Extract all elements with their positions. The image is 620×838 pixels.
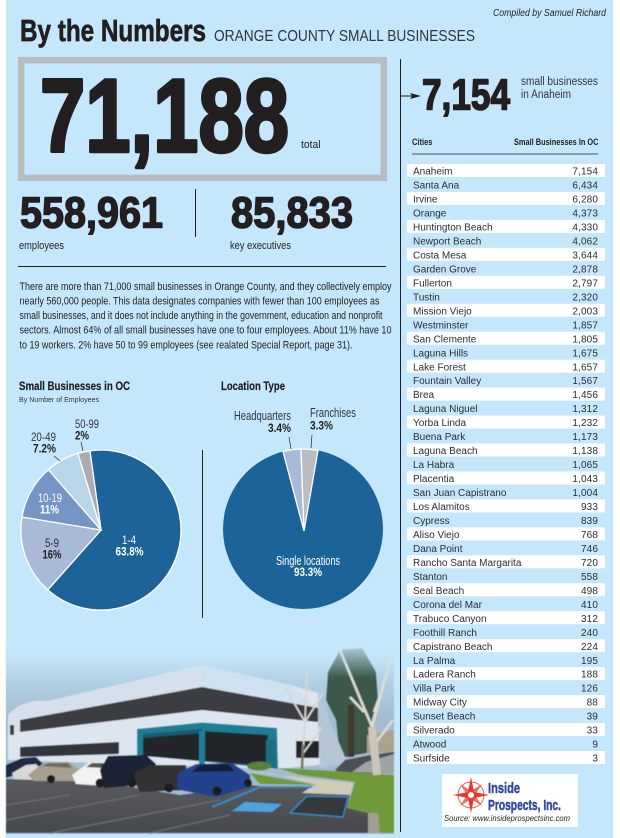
table: cities: 7,154 (572, 167, 598, 178)
intro paragraph: sectors. Almost 64% of all small businesses have one to four employees. About 11% have 10 (20, 324, 392, 336)
table: cities: Dana Point (413, 544, 463, 555)
stat: key executives: key executives (230, 240, 291, 252)
intro paragraph: nearly 560,000 people. This data designates companies with fewer than 100 employees as (20, 296, 380, 308)
pie label: 50-99: 50-99 (75, 417, 99, 431)
heading: small businesses in OC: Small Businesses in OC (19, 379, 130, 393)
table: cities: Midway City (413, 698, 467, 709)
table: cities: 768 (581, 530, 598, 541)
table: cities: 240 (581, 628, 598, 639)
table: cities: 933 (581, 502, 598, 513)
logo: Inside Prospects (442, 774, 578, 827)
intro paragraph: small businesses, and it does not include anything in the government, education and nonprofit (20, 310, 382, 322)
table: cities: Costa Mesa (413, 250, 467, 261)
table: cities: Cypress (413, 516, 450, 527)
table: cities: 1,065 (572, 460, 598, 471)
table: cities: Anaheim (413, 167, 452, 178)
pie label: headquarters: 3.4% (268, 423, 291, 435)
table: cities: 3,644 (572, 250, 598, 261)
table: cities: Aliso Viejo (413, 530, 460, 541)
pie label: single locations (276, 554, 340, 579)
building (8, 665, 347, 769)
logo: Inside Prospects: Inside (488, 780, 520, 797)
pie label: single locations: Single locations (276, 554, 340, 568)
table: cities: 1,567 (572, 376, 598, 387)
table: cities: 224 (581, 642, 598, 653)
table: cities: 6,434 (572, 181, 598, 192)
heading: location type: Location Type (221, 379, 285, 393)
table: cities: 1,043 (572, 474, 598, 485)
logo: Inside Prospects: Prospects, Inc. (488, 797, 561, 814)
table: cities: 1,456 (572, 390, 598, 401)
table: cities: Mission Viejo (413, 306, 472, 317)
table: cities: Tustin (413, 292, 440, 303)
bare tree: large (340, 650, 393, 745)
pie label: franchises: Franchises (310, 406, 356, 420)
table: cities: 746 (581, 544, 598, 555)
icon: compass star (453, 777, 489, 813)
table: cities: Stanton (413, 572, 447, 583)
table: cities: Huntington Beach (413, 222, 493, 233)
heading: small businesses in OC (19, 379, 130, 404)
credit line: Compiled by Samuel Richard (493, 8, 606, 19)
pie label: 5-9 (42, 536, 62, 562)
table: cities: 195 (581, 656, 598, 667)
table: cities: Westminster (413, 320, 469, 331)
pie label: 20-49: 20-49 (31, 430, 56, 444)
pie label: franchises (310, 406, 356, 448)
table: cities: 4,373 (572, 208, 598, 219)
table: cities: Capistrano Beach (413, 642, 492, 653)
table header: Small Businesses In OC (514, 137, 599, 148)
table: cities: Yorba Linda (413, 418, 466, 429)
table: cities: Brea (413, 390, 435, 401)
table header: Cities (412, 137, 432, 148)
table header (412, 137, 599, 155)
building entrance (137, 722, 278, 769)
bare tree: small (285, 668, 323, 769)
intro paragraph (20, 281, 392, 352)
table: cities: 188 (581, 670, 598, 681)
table: cities: 1,675 (572, 348, 598, 359)
table: cities: 1,312 (572, 404, 598, 415)
heading: small businesses in OC: By Number of Employees (19, 395, 99, 404)
pie label: franchises: 3.3% (310, 420, 333, 432)
photo: office building and parking lot (6, 640, 394, 834)
far cars right (335, 752, 394, 775)
table: cities: Los Alamitos (413, 502, 470, 513)
table: cities: La Palma (413, 656, 456, 667)
table: cities: 1,232 (572, 418, 598, 429)
logo: Inside Prospects: Source: www.insideprospectsinc.com (444, 813, 570, 823)
table: cities: La Habra (413, 460, 455, 471)
table: cities: Laguna Hills (413, 348, 468, 359)
pie label: 1-4 (116, 533, 144, 558)
total number: 71,188 (40, 58, 289, 174)
pie label: 1-4: 63.8% (116, 546, 144, 558)
intro paragraph: There are more than 71,000 small businesses in Orange County, and they collectively employ (20, 281, 392, 293)
table: cities: Lake Forest (413, 362, 466, 373)
table: cities: Seal Beach (413, 586, 464, 597)
table: cities: Trabuco Canyon (413, 614, 487, 625)
table: cities: Orange (413, 208, 447, 219)
table: cities: Garden Grove (413, 264, 477, 275)
table: cities: 1,173 (572, 432, 598, 443)
stat: Anaheim businesses: 7,154 (422, 70, 510, 120)
pie chart: location type (223, 449, 383, 609)
pie label: headquarters: Headquarters (234, 409, 291, 423)
table: cities: Corona del Mar (413, 600, 483, 611)
pie label: 10-19: 11% (40, 504, 59, 516)
table: cities: Laguna Beach (413, 446, 478, 457)
table: cities: Villa Park (413, 684, 456, 695)
table: cities: 2,003 (572, 306, 598, 317)
subtitle: ORANGE COUNTY SMALL BUSINESSES (214, 28, 475, 45)
table: cities: 312 (581, 614, 598, 625)
table: cities: Silverado (413, 726, 455, 737)
pie label: 50-99 (75, 417, 99, 451)
table: cities: 39 (587, 712, 598, 723)
table: cities: 410 (581, 600, 598, 611)
parking markings (212, 787, 312, 807)
pie label: 20-49 (31, 430, 60, 461)
table: cities: 6,280 (572, 195, 598, 206)
table: cities: 4,330 (572, 222, 598, 233)
pie label: 5-9: 5-9 (45, 536, 59, 550)
table: cities: Santa Ana (413, 181, 460, 192)
stat: employees: 558,961 (20, 188, 163, 238)
table: cities: Atwood (413, 740, 446, 751)
table: cities: Fullerton (413, 278, 452, 289)
pie label: 20-49: 7.2% (33, 444, 56, 456)
table: cities: 1,857 (572, 320, 598, 331)
table: cities: Laguna Niguel (413, 404, 478, 415)
table: cities (407, 164, 605, 765)
table: cities: 558 (581, 572, 598, 583)
table: cities: 4,062 (572, 236, 598, 247)
table: cities: 1,657 (572, 362, 598, 373)
panel: total businesses (21, 58, 384, 178)
tree: background pine (326, 648, 378, 758)
table: cities: Rancho Santa Margarita (413, 558, 522, 569)
table: cities: 88 (587, 698, 598, 709)
table: cities: Fountain Valley (413, 376, 481, 387)
total label: total (301, 139, 320, 151)
table: cities: 3 (592, 754, 598, 765)
stat: key executives: 85,833 (231, 188, 353, 238)
table: cities: Surfside (413, 754, 450, 765)
pie chart: businesses by number of employees (21, 450, 181, 610)
table: cities: San Juan Capistrano (413, 488, 507, 499)
stat: Anaheim businesses (422, 70, 598, 120)
title: By the Numbers (20, 14, 206, 48)
table: cities: 33 (587, 726, 598, 737)
pie label: 5-9: 16% (42, 550, 62, 562)
table: cities: Buena Park (413, 432, 466, 443)
table: cities: 2,878 (572, 264, 598, 275)
stat: Anaheim businesses: small businesses (521, 76, 598, 88)
pie label: single locations: 93.3% (294, 567, 322, 579)
table: cities: 2,797 (572, 278, 598, 289)
pie label: 1-4: 1-4 (122, 533, 136, 547)
table: cities: 2,320 (572, 292, 598, 303)
table: cities: 1,805 (572, 334, 598, 345)
table: cities: San Clemente (413, 334, 477, 345)
table: cities: Foothill Ranch (413, 628, 477, 639)
table: cities: 1,138 (572, 446, 598, 457)
table: cities: 126 (581, 684, 598, 695)
table: cities: Placentia (413, 474, 455, 485)
pie label: 10-19: 10-19 (38, 491, 62, 505)
table: cities: 720 (581, 558, 598, 569)
pie label: headquarters (234, 409, 291, 449)
table: cities: 9 (592, 740, 598, 751)
table: cities: Newport Beach (413, 236, 481, 247)
table: cities: 839 (581, 516, 598, 527)
pie label: 10-19 (38, 491, 62, 516)
stat: employees: employees (19, 240, 64, 252)
landscaping (277, 768, 394, 833)
table: cities: Sunset Beach (413, 712, 475, 723)
table: cities: 1,004 (572, 488, 598, 499)
pie label: 50-99: 2% (75, 430, 89, 442)
intro paragraph: to 19 workers. 2% have 50 to 99 employees (see realated Special Report, page 31). (20, 340, 352, 352)
asphalt parking lot (6, 779, 368, 833)
parked cars (6, 757, 44, 778)
table: cities: Ladera Ranch (413, 670, 476, 681)
stat: Anaheim businesses: in Anaheim (521, 89, 571, 101)
arrow to Anaheim number (401, 93, 421, 99)
table: cities: Irvine (413, 195, 438, 206)
table: cities: 498 (581, 586, 598, 597)
